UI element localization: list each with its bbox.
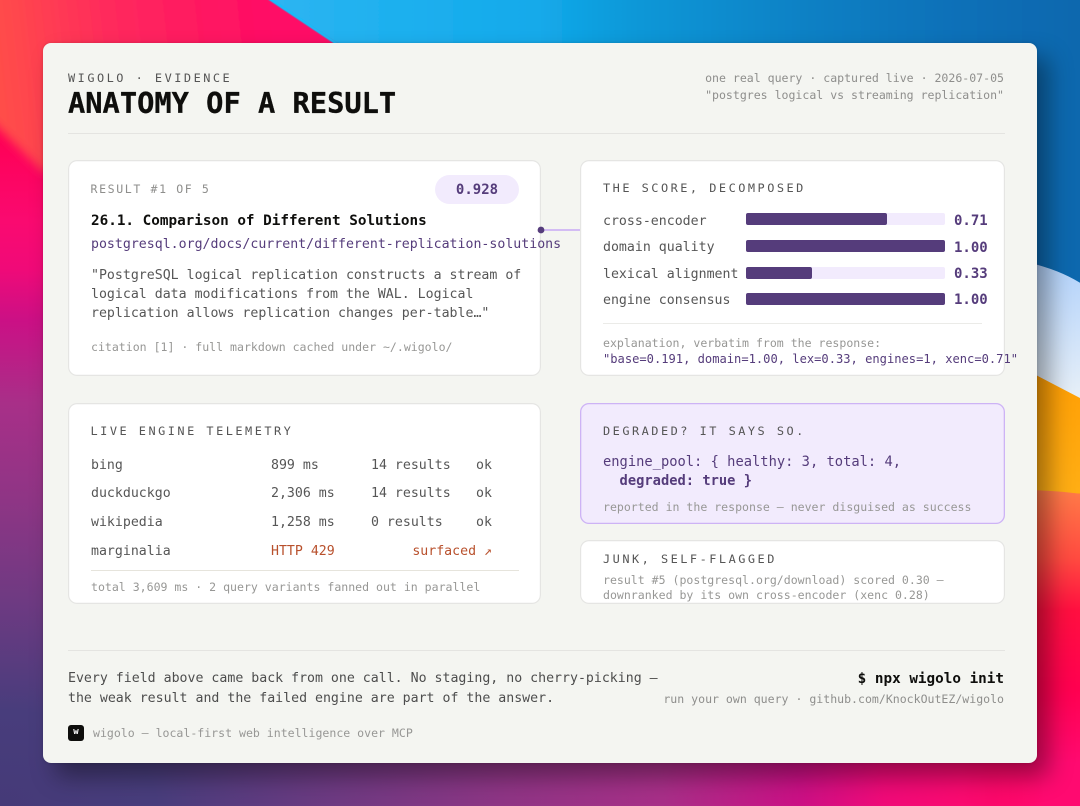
degraded heading: DEGRADED? IT SAYS SO. (603, 424, 806, 438)
row: marginalia: marginalia (91, 544, 171, 558)
score badge: 0.928 (456, 182, 498, 198)
bar: domain quality (603, 240, 988, 256)
result url: postgresql.org/docs/current/different-replication-solutions (91, 237, 561, 252)
row: bing (91, 458, 492, 472)
bar: engine consensus (603, 292, 988, 308)
row: duckduckgo (91, 486, 492, 501)
icon: wigolo logo (68, 725, 84, 741)
row: marginalia (91, 544, 492, 558)
result rank label: RESULT #1 OF 5 (90, 182, 211, 196)
score heading: THE SCORE, DECOMPOSED (603, 181, 806, 195)
bar: engine consensus: 1.00 (954, 292, 988, 308)
row: bing: bing (91, 458, 123, 472)
quote snippet (91, 268, 521, 321)
panel: junk self-flagged (580, 540, 1005, 604)
engine pool code: degraded: true } (620, 473, 752, 489)
row: duckduckgo: 2,306 ms (271, 486, 335, 501)
panel: degraded notice (580, 403, 1005, 524)
query metadata: "postgres logical vs streaming replication" (705, 88, 1004, 102)
row: bing: ok (476, 458, 492, 472)
row: bing: 899 ms (271, 458, 319, 472)
score badge (435, 175, 519, 204)
row: wikipedia: 1,258 ms (271, 515, 335, 530)
junk note: result #5 (postgresql.org/download) scored 0.30 — (603, 573, 944, 587)
bar: lexical alignment (603, 266, 988, 282)
bar: domain quality: 1.00 (954, 240, 988, 256)
row: duckduckgo: ok (476, 486, 492, 501)
query metadata (705, 71, 1004, 102)
panel: score decomposition (580, 160, 1005, 376)
engine pool code: engine_pool: { healthy: 3, total: 4, (603, 454, 901, 470)
row: wikipedia: wikipedia (91, 515, 163, 530)
result title: 26.1. Comparison of Different Solutions (91, 213, 427, 229)
panel: result card (68, 160, 541, 376)
closing statement (68, 671, 658, 706)
eyebrow: WIGOLO · EVIDENCE (68, 71, 232, 85)
bar: cross-encoder: 0.71 (954, 213, 988, 229)
bar: cross-encoder: cross-encoder (603, 214, 707, 228)
brand line: wigolo — local-first web intelligence over MCP (93, 726, 413, 740)
row: marginalia: surfaced ↗ (412, 544, 492, 558)
panel: live engine telemetry (68, 403, 541, 604)
closing statement: Every field above came back from one call. No staging, no cherry-picking — (68, 671, 658, 686)
junk note: downranked by its own cross-encoder (xenc 0.28) (603, 588, 930, 602)
row: wikipedia (91, 515, 492, 530)
repo link: run your own query · github.com/KnockOutEZ/wigolo (663, 692, 1004, 706)
bar: cross-encoder (603, 213, 988, 229)
row: duckduckgo: 14 results (371, 486, 451, 501)
install command: $ npx wigolo init (858, 671, 1004, 687)
citation note: citation [1] · full markdown cached under ~/.wigolo/ (91, 340, 452, 354)
bar: lexical alignment: 0.33 (954, 266, 988, 282)
row: wikipedia: 0 results (371, 515, 443, 530)
telemetry heading: LIVE ENGINE TELEMETRY (90, 424, 293, 438)
row: marginalia: HTTP 429 (271, 544, 335, 558)
quote snippet: logical data modifications from the WAL. Logical (91, 287, 473, 302)
icon: wigolo logo: w (73, 727, 79, 737)
row: wikipedia: ok (476, 515, 492, 530)
bar: engine consensus: engine consensus (603, 292, 730, 308)
quote snippet: "PostgreSQL logical replication constructs a stream of (91, 268, 521, 283)
query metadata: one real query · captured live · 2026-07-05 (705, 71, 1004, 85)
explanation label: explanation, verbatim from the response: (603, 336, 881, 350)
degraded note: reported in the response — never disguised as success (603, 500, 971, 514)
title: ANATOMY OF A RESULT (68, 86, 396, 120)
bar: domain quality: domain quality (603, 240, 715, 255)
quote snippet: replication allows replication changes per-table…" (91, 306, 489, 321)
engine pool code (603, 454, 901, 489)
junk heading: JUNK, SELF-FLAGGED (603, 552, 777, 566)
explanation verbatim: "base=0.191, domain=1.00, lex=0.33, engines=1, xenc=0.71" (603, 352, 1018, 366)
junk note (603, 573, 944, 602)
row: duckduckgo: duckduckgo (91, 486, 171, 501)
telemetry total: total 3,609 ms · 2 query variants fanned out in parallel (91, 580, 480, 594)
bar: lexical alignment: lexical alignment (603, 266, 738, 282)
connector from result to score (538, 226, 580, 234)
closing statement: the weak result and the failed engine are part of the answer. (68, 691, 554, 706)
row: bing: 14 results (371, 458, 451, 472)
